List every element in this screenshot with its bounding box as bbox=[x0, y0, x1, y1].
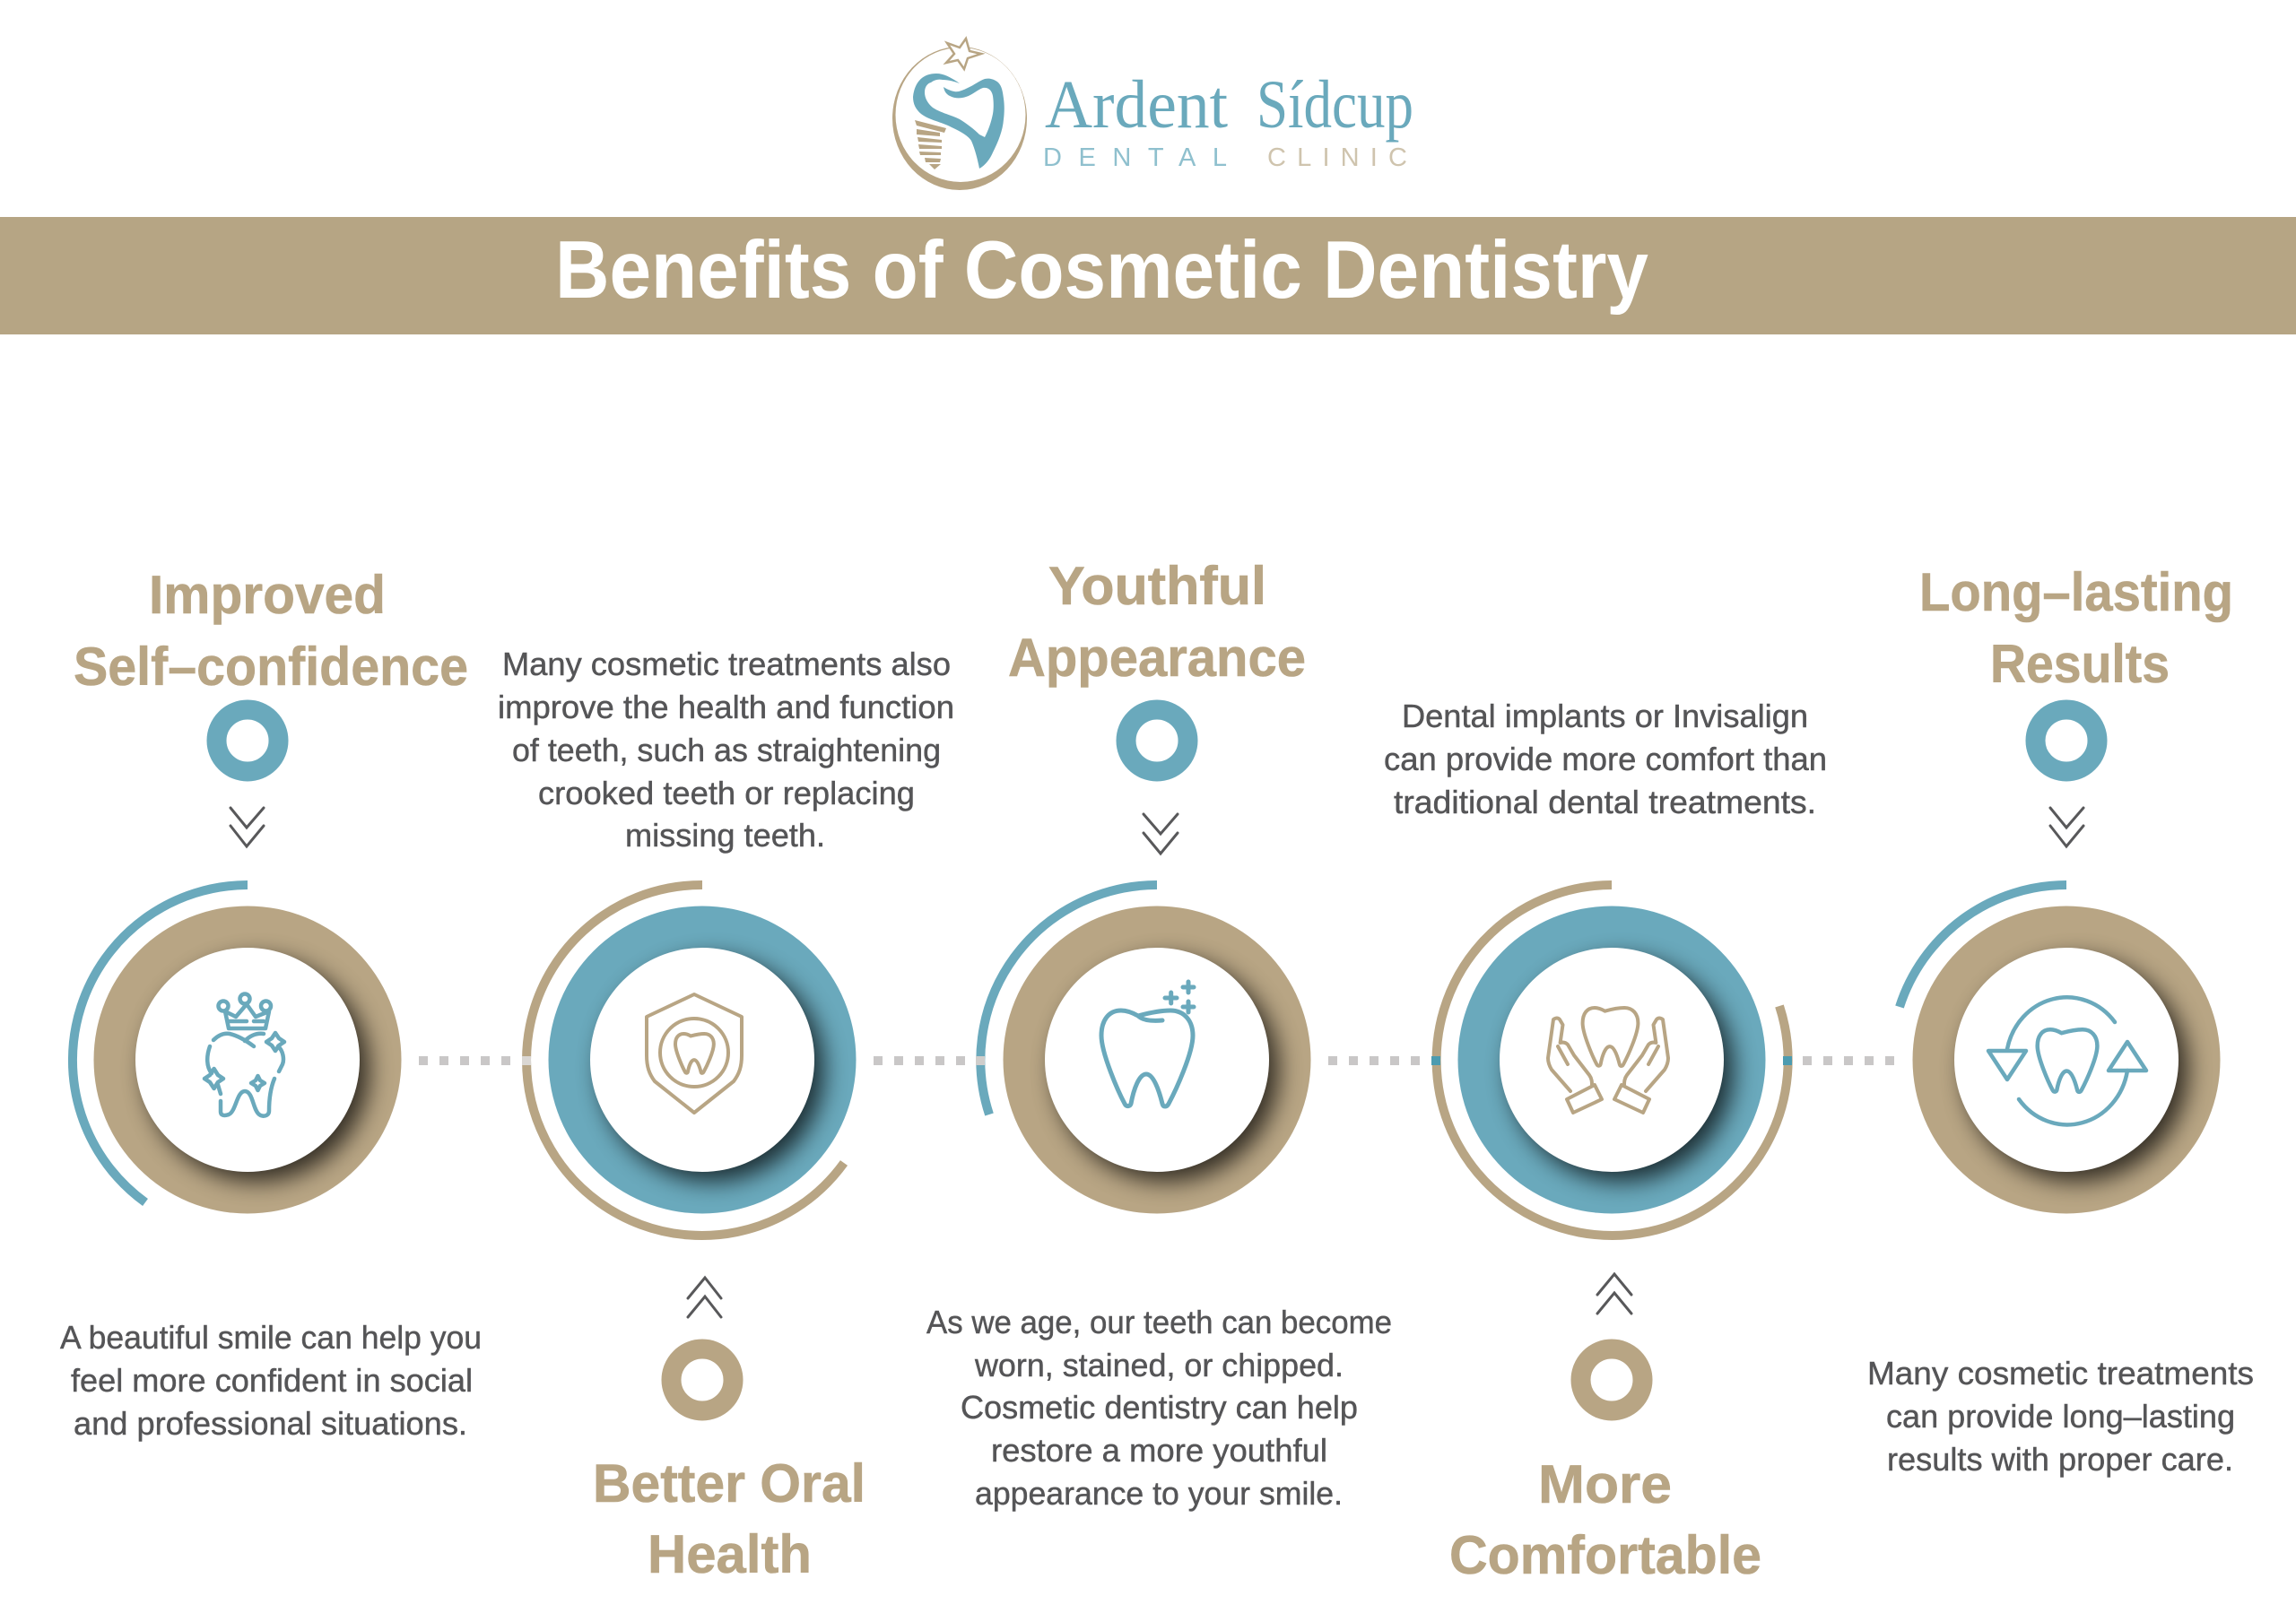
logo wordmark: DENTAL bbox=[1043, 143, 1227, 172]
description bbox=[926, 1304, 1392, 1512]
chevrons up bbox=[688, 1278, 721, 1317]
heading: improved self-confidence bbox=[74, 565, 468, 697]
outer arc bbox=[1437, 885, 1788, 1236]
title: Benefits of Cosmetic Dentistry bbox=[555, 225, 1648, 316]
icon: sparkling tooth bbox=[1101, 982, 1194, 1106]
marker ring bbox=[671, 1349, 734, 1411]
icon: tooth with cycle arrows bbox=[1988, 997, 2146, 1124]
description: results with proper care. bbox=[1887, 1441, 2233, 1478]
heading: more comfortable: More bbox=[1538, 1454, 1672, 1514]
marker ring bbox=[1126, 710, 1187, 771]
chevrons up bbox=[1597, 1274, 1631, 1314]
logo wordmark bbox=[1043, 67, 1413, 172]
panel: better oral health bbox=[498, 646, 954, 1584]
description: and professional situations. bbox=[74, 1405, 467, 1442]
chevrons down bbox=[2050, 808, 2083, 846]
logo wordmark: Ardent bbox=[1045, 67, 1228, 143]
logo wordmark: Sídcup bbox=[1257, 67, 1413, 143]
ring with shadow bbox=[93, 906, 402, 1214]
description: A beautiful smile can help you bbox=[60, 1319, 482, 1356]
heading: improved self-confidence: Improved bbox=[149, 565, 386, 625]
heading: long-lasting results: Results bbox=[1990, 634, 2170, 694]
panel: improved self-confidence bbox=[60, 565, 482, 1442]
panel: more comfortable bbox=[1384, 698, 1827, 1585]
logo bbox=[892, 39, 1413, 190]
description: improve the health and function bbox=[498, 689, 954, 725]
description: can provide long–lasting bbox=[1886, 1398, 2235, 1435]
heading: better oral health: Health bbox=[648, 1524, 812, 1584]
heading: youthful appearance: Appearance bbox=[1008, 628, 1306, 688]
description: As we age, our teeth can become bbox=[926, 1304, 1392, 1340]
description: Many cosmetic treatments bbox=[1867, 1355, 2254, 1392]
outer arc bbox=[526, 885, 844, 1236]
heading: better oral health bbox=[593, 1453, 865, 1584]
description: of teeth, such as straightening bbox=[512, 732, 941, 768]
outer arc bbox=[1900, 885, 2066, 1007]
description: Cosmetic dentistry can help bbox=[961, 1389, 1358, 1426]
chevrons down bbox=[230, 808, 264, 846]
ring with shadow bbox=[1912, 906, 2221, 1214]
title banner bbox=[0, 217, 2296, 334]
logo star bbox=[946, 39, 981, 69]
icon: tooth with crown bbox=[204, 993, 284, 1116]
heading: youthful appearance bbox=[1008, 556, 1306, 688]
connector dots over arcs bbox=[522, 1056, 1792, 1065]
logo implant bbox=[915, 120, 946, 169]
heading: better oral health: Better Oral bbox=[593, 1453, 865, 1513]
description: appearance to your smile. bbox=[975, 1475, 1343, 1512]
ring with shadow bbox=[1458, 906, 1765, 1214]
heading: improved self-confidence: Self–confidence bbox=[74, 637, 468, 697]
heading: youthful appearance: Youthful bbox=[1048, 556, 1266, 616]
ring with shadow bbox=[549, 906, 856, 1214]
marker ring bbox=[217, 710, 278, 771]
heading: long-lasting results bbox=[1919, 562, 2233, 694]
description: can provide more comfort than bbox=[1384, 741, 1827, 777]
description: worn, stained, or chipped. bbox=[974, 1347, 1344, 1383]
description: missing teeth. bbox=[625, 817, 825, 854]
logo oval bbox=[892, 47, 1027, 190]
description bbox=[498, 646, 954, 854]
description: traditional dental treatments. bbox=[1394, 784, 1816, 820]
description bbox=[60, 1319, 482, 1442]
description: crooked teeth or replacing bbox=[538, 775, 915, 811]
description bbox=[1384, 698, 1827, 820]
heading: long-lasting results: Long–lasting bbox=[1919, 562, 2233, 622]
panel: youthful appearance bbox=[926, 556, 1392, 1512]
outer arc bbox=[73, 885, 248, 1202]
logo tooth bbox=[913, 74, 1004, 169]
ring with shadow bbox=[1003, 906, 1311, 1214]
panel: long-lasting results bbox=[1867, 562, 2254, 1478]
heading: more comfortable bbox=[1449, 1454, 1761, 1585]
chevrons down bbox=[1144, 814, 1178, 854]
marker ring bbox=[2036, 710, 2097, 771]
outer arc bbox=[980, 885, 1157, 1114]
dotted connectors bbox=[419, 1056, 1894, 1065]
heading: more comfortable: Comfortable bbox=[1449, 1525, 1761, 1585]
icon: hands holding tooth bbox=[1548, 1008, 1668, 1113]
logo wordmark: CLINIC bbox=[1267, 143, 1407, 172]
description: restore a more youthful bbox=[991, 1432, 1327, 1469]
marker ring bbox=[1580, 1349, 1643, 1411]
icon: shield with tooth bbox=[647, 994, 742, 1113]
description: Many cosmetic treatments also bbox=[502, 646, 951, 682]
description: feel more confident in social bbox=[71, 1362, 473, 1399]
description: Dental implants or Invisalign bbox=[1402, 698, 1808, 734]
description bbox=[1867, 1355, 2254, 1478]
